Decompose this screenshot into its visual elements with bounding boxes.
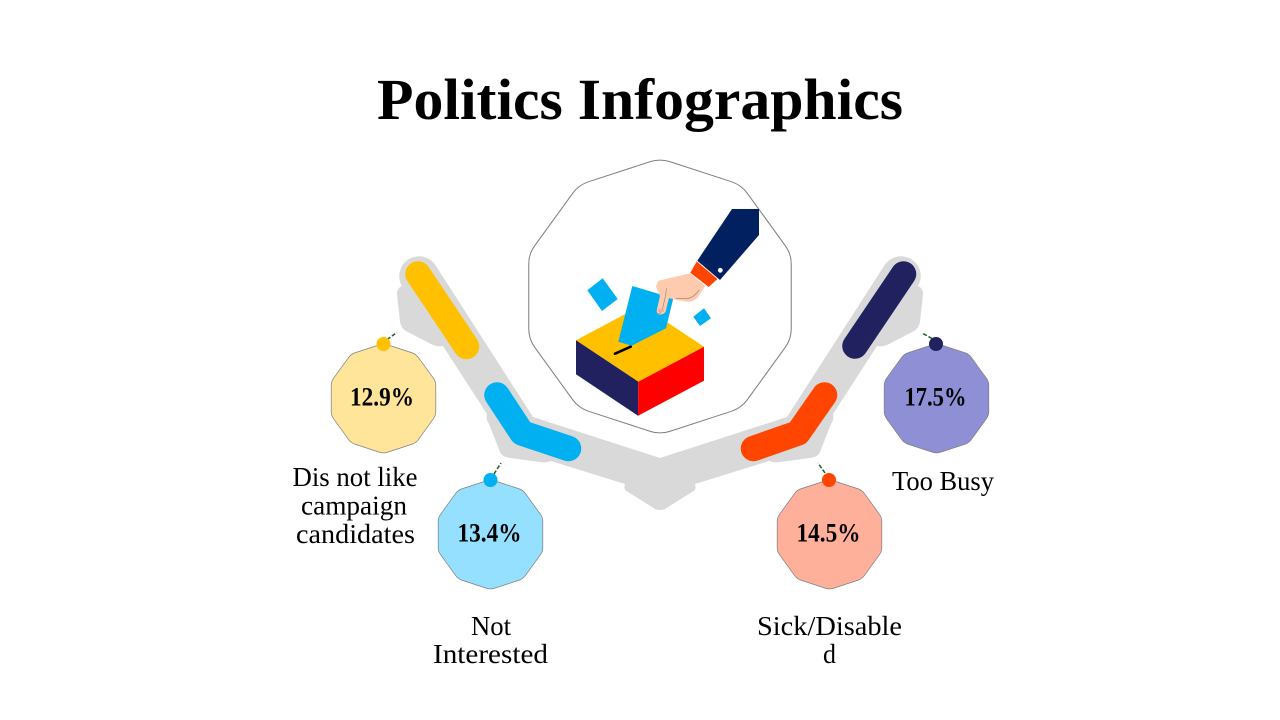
navy segment <box>855 274 904 346</box>
label: not interested: Interested <box>433 639 549 669</box>
value: 13.4% <box>458 518 522 548</box>
label: campaign candidates: candidates <box>296 519 415 549</box>
panel: 13.4% <box>438 463 543 589</box>
label: campaign candidates <box>292 462 418 549</box>
purple decagon <box>884 344 989 453</box>
panel: central decagon with ballot illustration <box>529 160 791 433</box>
icon: hand and sleeve <box>656 209 759 315</box>
orange decagon <box>777 480 882 589</box>
label: too busy: Too Busy <box>892 466 994 496</box>
decagon outline <box>529 160 791 433</box>
navy dot <box>929 337 943 351</box>
navy connector <box>922 333 932 338</box>
yellow dot <box>376 337 390 351</box>
panel: 17.5% <box>884 333 989 453</box>
blue decagon <box>438 480 543 589</box>
title: Politics Infographics <box>377 67 903 132</box>
yellow decagon <box>331 344 436 453</box>
panel: grey chevron backdrop <box>397 256 923 510</box>
panel: 14.5% <box>777 463 882 589</box>
icon: ballot box <box>576 305 704 416</box>
blue dot <box>484 473 498 487</box>
label: sick disabled: d <box>823 639 836 669</box>
label: sick disabled <box>757 611 902 669</box>
label: not interested <box>433 611 549 669</box>
icon: large flying square <box>587 278 618 311</box>
panel: 12.9% <box>331 332 436 453</box>
label: campaign candidates: campaign <box>301 490 407 520</box>
blue connector <box>494 463 501 474</box>
yellow connector <box>387 332 397 340</box>
icon: ballot paper <box>618 286 673 346</box>
value: 14.5% <box>796 518 860 548</box>
orange dot <box>822 473 836 487</box>
label: campaign candidates: Dis not like <box>292 462 418 492</box>
blue segment <box>497 395 568 448</box>
orange segment <box>754 395 824 448</box>
label: sick disabled: Sick/Disable <box>757 611 902 641</box>
yellow segment <box>418 274 466 346</box>
value: 12.9% <box>350 382 414 412</box>
orange connector <box>818 463 825 473</box>
value: 17.5% <box>904 382 966 412</box>
label: not interested: Not <box>471 611 511 641</box>
icon: small flying square <box>693 308 711 326</box>
